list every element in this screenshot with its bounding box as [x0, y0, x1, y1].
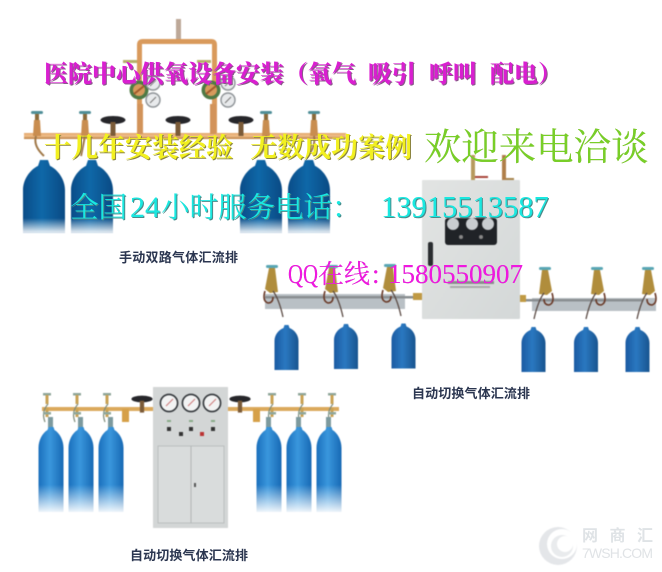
headline: hospital central oxygen installation: 配电）: [490, 61, 562, 88]
service phone line: 全国: [70, 192, 127, 224]
watermark name: 网 商 汇: [582, 527, 653, 545]
cylinder valves: [31, 111, 320, 156]
QQ number: 在线: [318, 260, 370, 289]
headline: hospital central oxygen installation: 吸引: [368, 61, 416, 88]
caption: manual manifold: 手动双路气体汇流排: [119, 250, 238, 265]
headline: hospital central oxygen installation: （氧气: [284, 61, 357, 88]
caption: wall-mounted automatic manifold: 自动切换气体汇流排: [412, 386, 530, 401]
manifold rails: [265, 293, 656, 311]
watermark url: 7WSH.COM: [582, 545, 653, 561]
service phone line: 24: [130, 191, 160, 224]
oxygen cylinders: [274, 324, 650, 372]
cylinder valves: [43, 393, 336, 428]
service phone line: 13915513587: [381, 190, 549, 224]
brass manifolds: [42, 407, 339, 422]
top outlet pipes: [471, 155, 514, 181]
panel: wall-mounted automatic manifold: [264, 155, 656, 372]
QQ contact line: [288, 259, 523, 289]
handwheels: [131, 396, 251, 413]
slogan: welcome to call: 欢迎来电洽谈: [424, 127, 648, 169]
control cabinet: [422, 180, 520, 319]
regulators and gauges: [130, 76, 235, 134]
cylinder valves and hoses: [264, 264, 656, 319]
watermark logo: [539, 527, 653, 565]
control cabinet with doors: [153, 387, 228, 528]
QQ label: QQ: [288, 259, 318, 289]
watermark swirl icon: [539, 527, 577, 565]
headline: hospital central oxygen installation: 医院中心供氧设备安装: [44, 60, 284, 88]
caption: floor-standing automatic manifold: 自动切换气体汇流排: [130, 548, 248, 563]
slogan: years of experience: 十几年安装经验: [44, 133, 233, 163]
slogan: years of experience: 无数成功案例: [250, 132, 412, 163]
QQ number: 1580550907: [388, 259, 523, 289]
oxygen cylinders: [23, 160, 330, 233]
oxygen cylinders: [38, 427, 342, 512]
panel: manual dual-line gas manifold: [23, 19, 346, 233]
QQ number: :: [372, 259, 380, 289]
valve handwheels: [100, 116, 254, 136]
service phone line: 小时服务电话：: [161, 192, 361, 224]
copper pipework: [24, 19, 346, 139]
headline: hospital central oxygen installation: 呼叫: [429, 61, 477, 88]
panel: floor-standing automatic manifold: [38, 387, 342, 528]
